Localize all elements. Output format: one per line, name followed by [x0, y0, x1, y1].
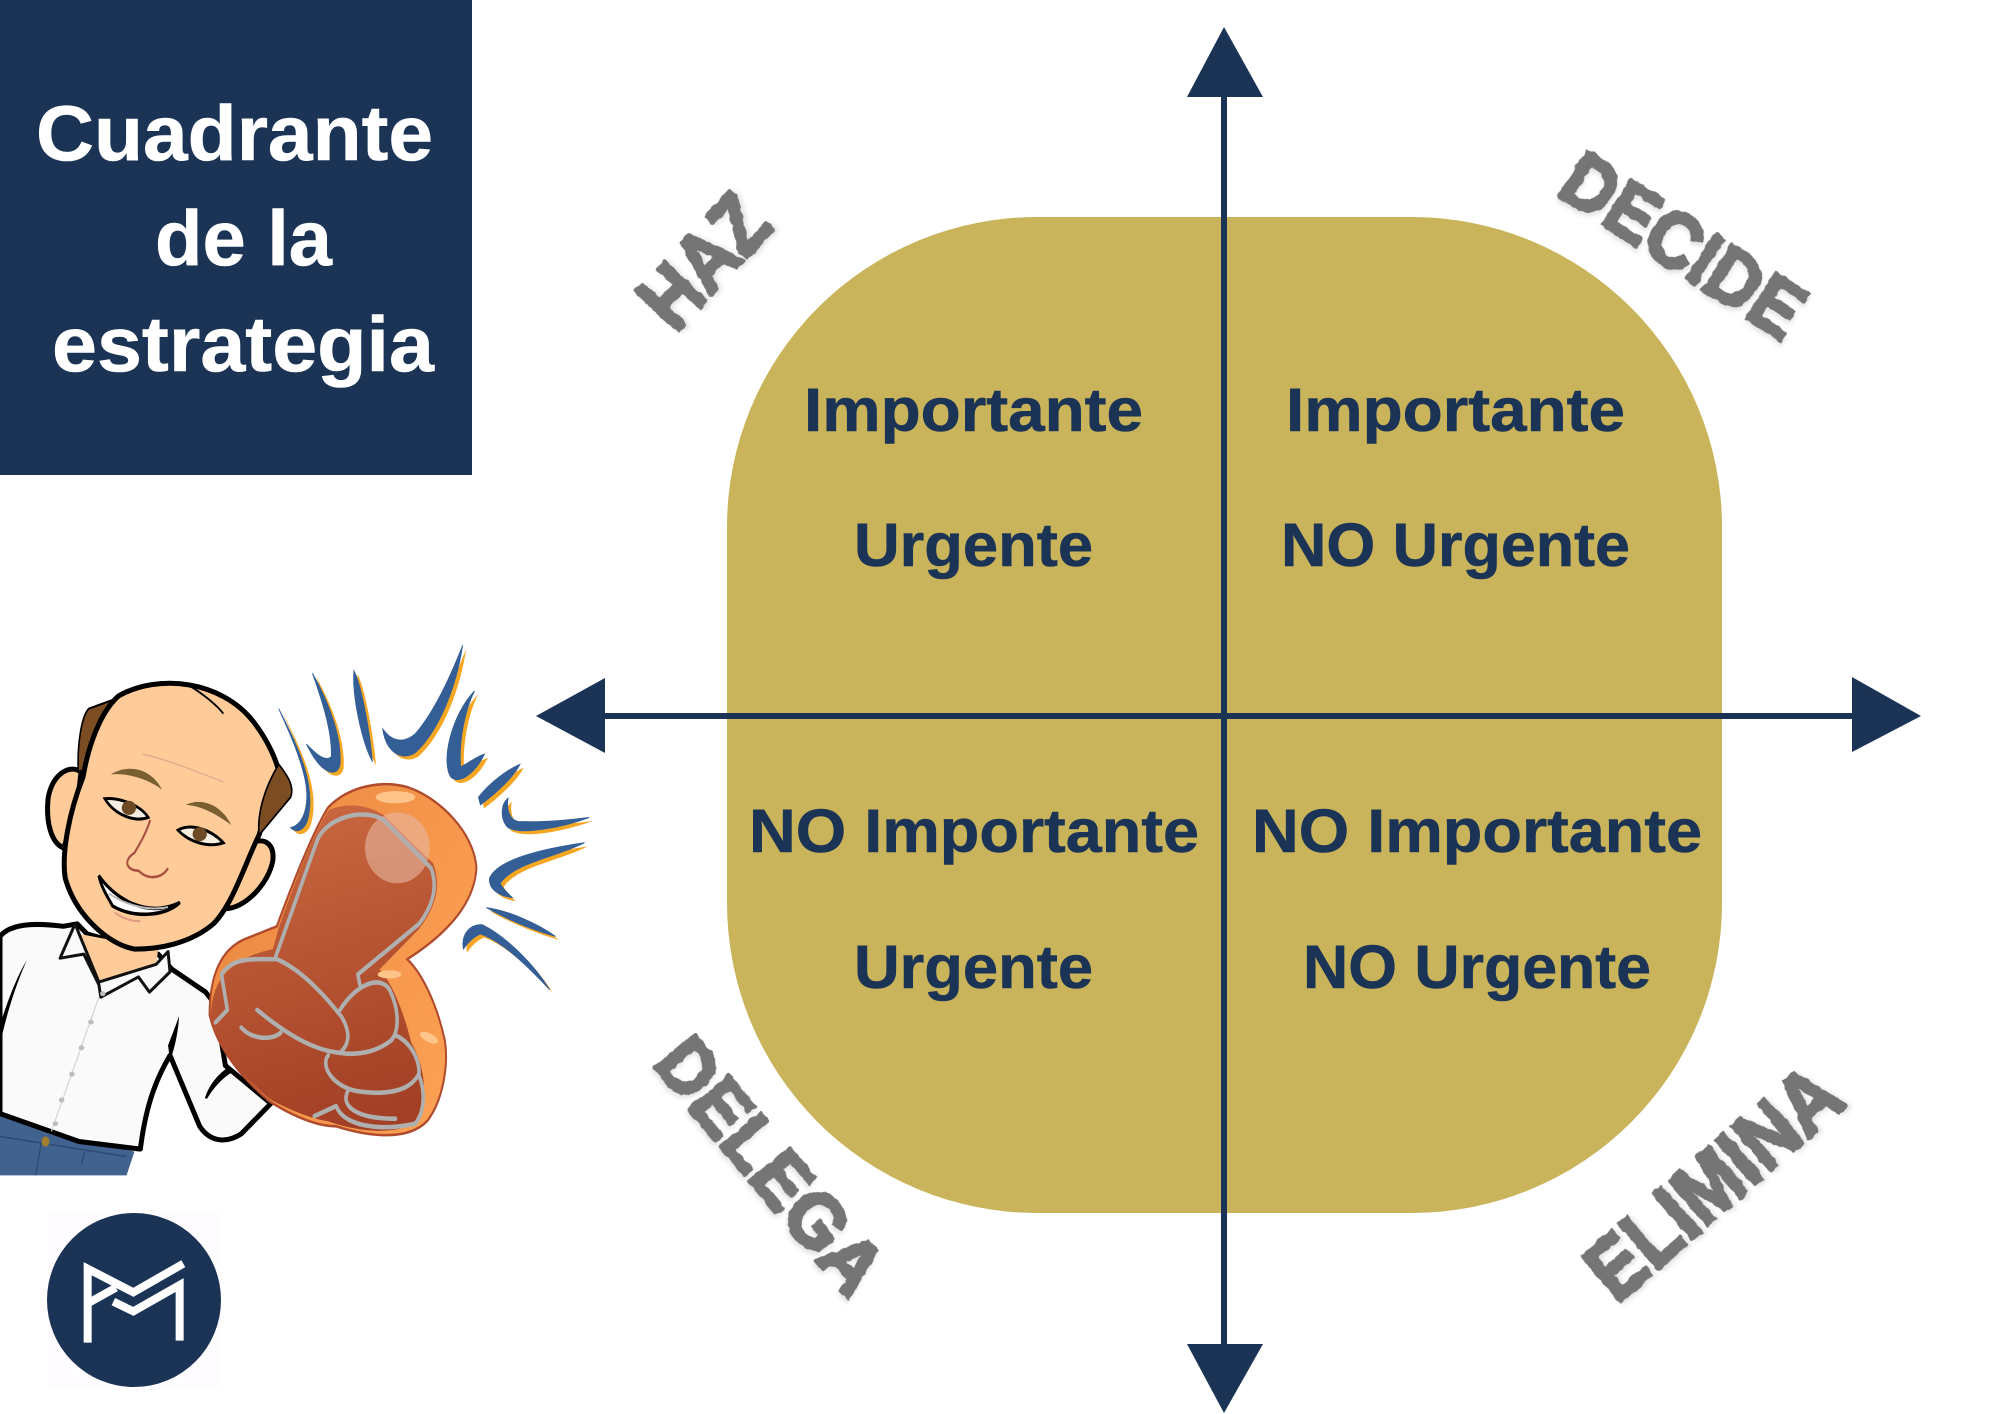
icon: thumbs up foam hand	[210, 784, 476, 1135]
quadrant text: no importante urgente	[749, 797, 1199, 1001]
neck	[79, 934, 158, 985]
quadrant text: importante no urgente: NO Urgente	[1281, 511, 1630, 579]
face features	[99, 686, 231, 921]
foam hand light lobes	[376, 791, 439, 1046]
brush label: DELEGA: DELEGA	[638, 1021, 901, 1311]
quadrant text: importante urgente	[804, 376, 1143, 579]
logo tile	[47, 1213, 221, 1388]
brush label: ELIMINA: ELIMINA	[1566, 1046, 1860, 1319]
foam hand red face	[211, 805, 437, 1131]
icon: speed lines around the thumb	[279, 645, 593, 993]
left hair	[78, 698, 117, 772]
title panel	[0, 0, 472, 475]
right ear	[225, 841, 273, 909]
brush label: DECIDE: DECIDE	[1545, 134, 1821, 356]
title text: de la	[155, 194, 333, 282]
sleeve folds	[0, 960, 233, 1098]
right hair	[259, 764, 292, 835]
left ear	[48, 769, 81, 848]
quadrant text: no importante urgente: Urgente	[854, 933, 1093, 1001]
quadrant text: importante urgente: Importante	[804, 376, 1143, 444]
quadrant text: no importante no urgente: NO Importante	[1252, 797, 1702, 865]
quadrant text: importante urgente: Urgente	[854, 511, 1093, 579]
title text	[36, 89, 435, 388]
foam hand silver outline	[215, 815, 434, 1127]
vertical axis arrow	[1187, 27, 1263, 1413]
brush label: HAZ: HAZ	[620, 176, 788, 347]
jeans details	[0, 1136, 127, 1175]
quadrant text: importante no urgente	[1281, 376, 1630, 579]
logo monogram	[88, 1264, 183, 1343]
shirt placket and buttons	[51, 991, 106, 1131]
foam hand highlight	[365, 812, 430, 883]
title text: Cuadrante	[36, 89, 433, 177]
character illustration: man giving thumbs up	[0, 645, 593, 1175]
jeans button	[42, 1136, 49, 1147]
quadrant text: no importante no urgente: NO Urgente	[1303, 933, 1651, 1001]
shirt collar	[60, 924, 170, 997]
foam hand orange base	[210, 784, 476, 1135]
head	[64, 683, 279, 949]
title text: estrategia	[52, 300, 435, 388]
quadrant text: importante no urgente: Importante	[1286, 376, 1625, 444]
jeans	[0, 1114, 134, 1175]
quadrant text: no importante no urgente	[1252, 797, 1702, 1001]
horizontal axis arrow	[536, 677, 1921, 753]
quadrant rounded background	[727, 217, 1722, 1213]
logo: circle with MM monogram	[47, 1213, 221, 1387]
shirt	[0, 924, 271, 1149]
quadrant text: no importante urgente: NO Importante	[749, 797, 1199, 865]
